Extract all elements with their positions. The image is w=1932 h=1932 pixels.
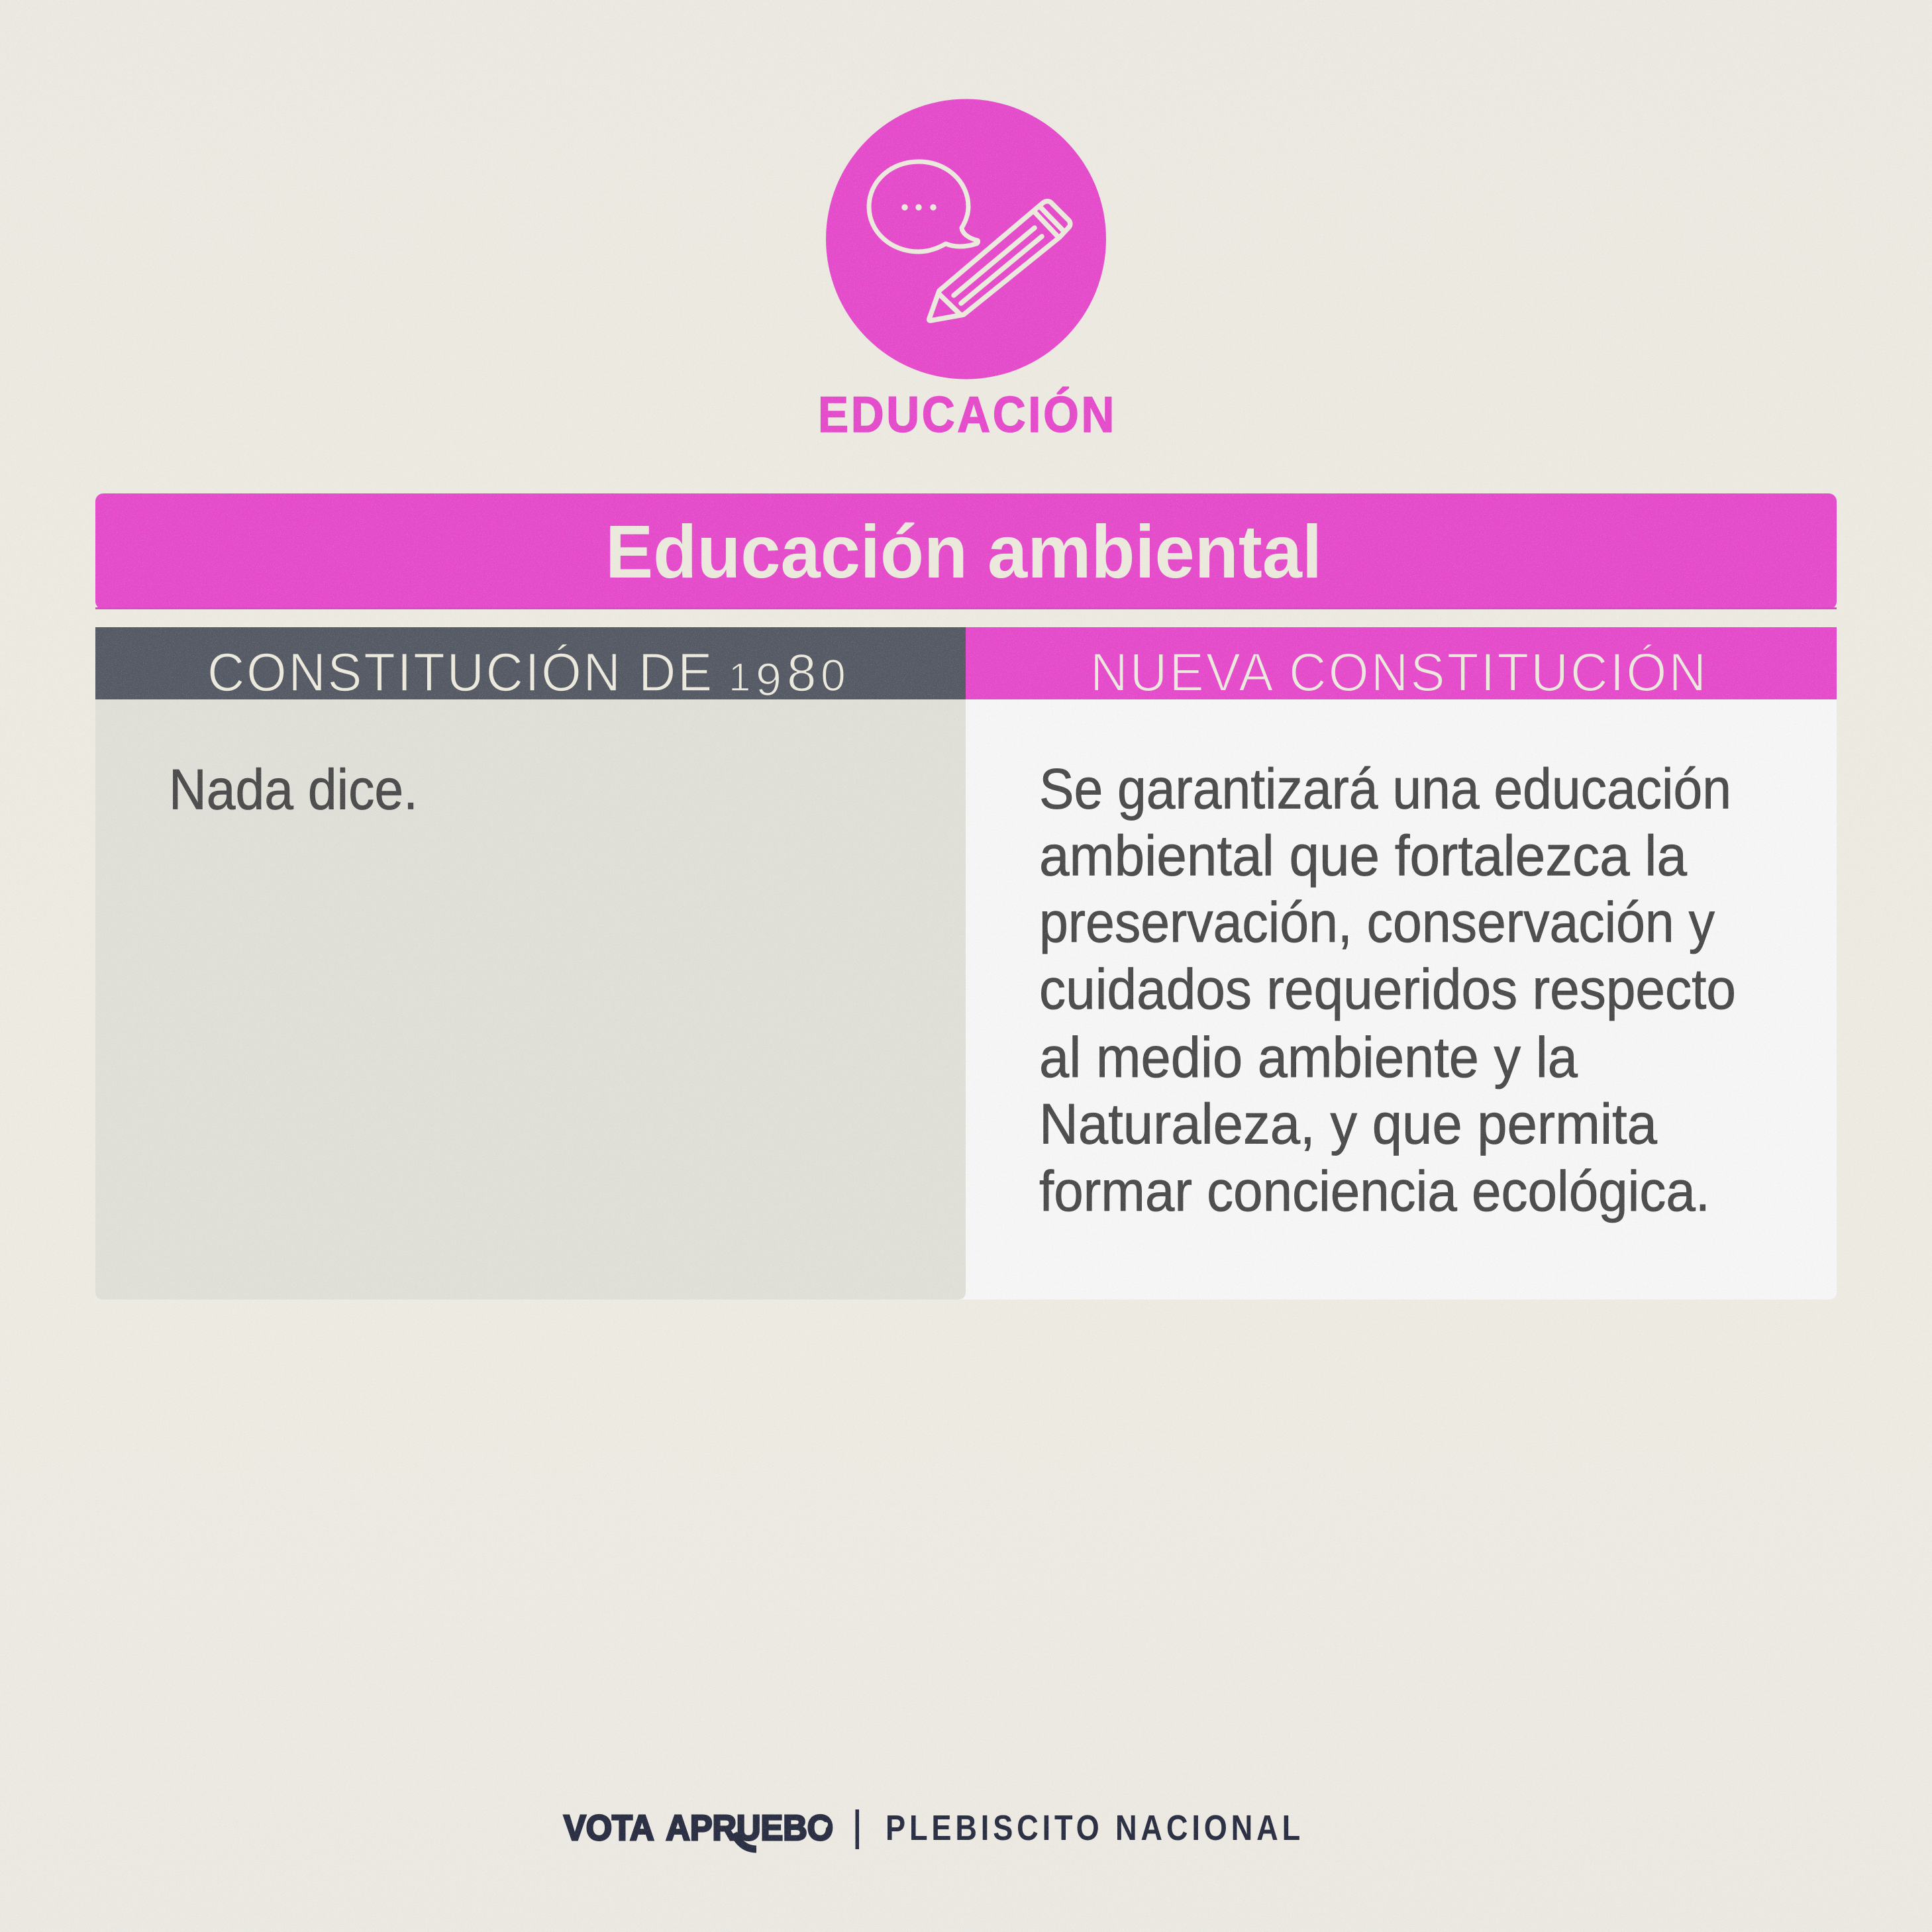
body text: nueva constitución: preservación, conservación y bbox=[1039, 891, 1715, 954]
divider bbox=[856, 1809, 859, 1849]
column heading text: constitución de 1980: 0 bbox=[821, 650, 846, 701]
body text: nada dice: Nada dice. bbox=[169, 758, 418, 821]
icon: pencil bbox=[929, 201, 1070, 321]
logo: vota apruebo: VOTA APRUEBO bbox=[564, 1808, 833, 1848]
icon: speech bubble bbox=[869, 162, 978, 252]
body text: nueva constitución: Naturaleza, y que permita bbox=[1039, 1093, 1657, 1156]
column heading text: constitución de 1980: 1 bbox=[729, 655, 750, 699]
logo: R tail bbox=[734, 1833, 756, 1849]
body text: nueva constitución bbox=[1039, 758, 1736, 1223]
column header: constitución de 1980 bbox=[95, 627, 966, 699]
footer text: plebiscito nacional: PLEBISCITO NACIONAL bbox=[886, 1808, 1304, 1848]
body text: nueva constitución: al medio ambiente y la bbox=[1039, 1026, 1578, 1090]
heading: EDUCACIÓN: EDUCACIÓN bbox=[818, 387, 1117, 443]
body text: nueva constitución: ambiental que fortalezca la bbox=[1039, 824, 1687, 888]
body text: nueva constitución: formar conciencia ecológica. bbox=[1039, 1160, 1710, 1223]
footer bbox=[564, 1808, 1304, 1849]
panel: nueva constitución bbox=[954, 627, 1837, 1299]
badge circle bbox=[826, 99, 1106, 379]
column heading text: nueva constitución: NUEVA CONSTITUCIÓN bbox=[1090, 642, 1708, 703]
column heading text: constitución de 1980: 9 bbox=[756, 654, 782, 705]
body text: nueva constitución: Se garantizará una educación bbox=[1039, 758, 1731, 821]
panel: constitución de 1980 bbox=[95, 627, 966, 1299]
logo: heart bbox=[815, 1822, 828, 1833]
column heading text: constitución de 1980: CONSTITUCIÓN DE bbox=[207, 642, 714, 703]
body text: nueva constitución: cuidados requeridos respecto bbox=[1039, 958, 1736, 1021]
panel body: right bbox=[954, 699, 1837, 1299]
title band bbox=[95, 493, 1837, 609]
icon: education badge bbox=[826, 99, 1106, 379]
column heading text: constitución de 1980: 8 bbox=[787, 643, 816, 702]
title: Educación ambiental: Educación ambiental bbox=[605, 510, 1322, 593]
panel body: left bbox=[95, 699, 966, 1299]
column header: nueva constitución bbox=[966, 627, 1837, 699]
